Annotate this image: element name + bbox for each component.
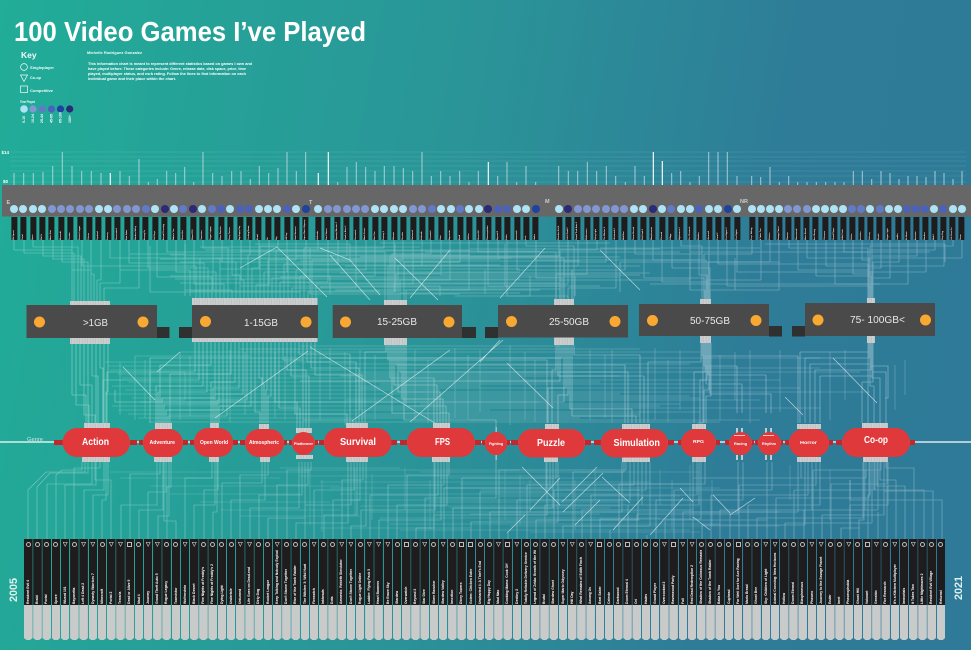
game price tags and time played dots: not rated: Mad 4	[933, 234, 935, 240]
timeline of 100 game cards, 2005 to 2021: Stardew	[395, 591, 399, 604]
timeline of 100 game cards, 2005 to 2021: Transistor	[174, 588, 178, 604]
game price tags and time played dots: ESRB E: Wii Sports	[13, 230, 15, 240]
timeline of 100 game cards, 2005 to 2021: Portal	[44, 594, 48, 604]
timeline of 100 game cards, 2005 to 2021: Red Dead Redemption 2	[690, 565, 694, 604]
genre: Puzzle	[518, 429, 585, 458]
panel: disk space 1-15GB	[179, 298, 318, 342]
timeline of 100 game cards, 2005 to 2021: Far Well Sort for Ace Racing	[736, 558, 740, 604]
genre: Adventure	[143, 429, 183, 457]
game price tags and time played dots: ESRB E: Slime Rancher	[220, 226, 222, 240]
genre: FPS	[407, 428, 475, 457]
panel: disk space 75-100GB	[792, 298, 935, 343]
timeline of 100 game cards, 2005 to 2021: Phasmophobia	[846, 580, 850, 604]
timeline of 100 game cards, 2005 to 2021: Minecraft	[100, 589, 104, 604]
timeline of 100 game cards, 2005 to 2021: Big Happy Day	[487, 580, 491, 604]
game price tags and time played dots: ESRB E: Overcooked	[116, 228, 118, 240]
game price tags and time played dots: ESRB T: Bayonetta	[449, 230, 451, 240]
timeline of 100 game cards, 2005 to 2021: Dead or Alive 5	[127, 580, 131, 604]
game price tags and time played dots: ESRB T: Genshin	[402, 232, 404, 240]
genre: Adventure: Adventure	[150, 440, 175, 446]
game price tags and time played dots: ESRB T: Dead or Alive 5	[345, 226, 347, 240]
game price tags and time played dots: ESRB T: Overwatch	[355, 230, 357, 240]
game price tags and time played dots: ESRB M: The Witcher 3	[604, 227, 606, 240]
brightest price bars	[110, 152, 662, 185]
timeline of 100 game cards, 2005 to 2021: Braid	[35, 595, 39, 604]
rating labels: E	[6, 200, 10, 206]
timeline of 100 game cards, 2005 to 2021: Little Nightmares 2	[920, 573, 924, 604]
genre: Racing: Racing	[734, 442, 748, 446]
key: player modes	[20, 50, 54, 93]
genre: Platformer: Platformer	[294, 442, 314, 446]
timeline of 100 game cards, 2005 to 2021: Be Brave Sky	[386, 582, 390, 604]
key: player modes: Competitive	[30, 88, 54, 93]
game price tags and time played dots: ESRB E: Super Mario Odyssey	[304, 220, 306, 240]
genre: Rhythm	[758, 432, 781, 455]
timeline of 100 game cards, 2005 to 2021: Wolfenstein	[183, 585, 187, 604]
timeline of 100 game cards, 2005 to 2021: Rogue Light Online	[358, 573, 362, 604]
game price tags and time played dots: not rated: Amnesia	[915, 232, 917, 240]
game price tags and time played dots: ESRB T: Hollow	[468, 233, 470, 240]
game price tags and time played dots: ESRB M: Unturned	[708, 231, 710, 240]
game price tags and time played dots: ESRB E: Ori	[267, 237, 269, 240]
title: 100 Video Games I’ve Played	[14, 16, 366, 47]
game price tags and time played dots: ESRB M	[555, 205, 741, 240]
panel: disk space 1-15GB: 1-15GB	[244, 318, 278, 329]
key: time played scale: 100+	[68, 115, 72, 123]
game price tags and time played dots: not rated: Inscrtion	[860, 232, 862, 240]
timeline of 100 game cards, 2005 to 2021: Totally Reliable Delivery Service	[524, 552, 528, 604]
game price tags and time played dots: not rated: Be Brave	[906, 231, 908, 240]
timeline of 100 game cards, 2005 to 2021: It Takes Two	[911, 584, 915, 604]
game price tags and time played dots: ESRB M: Resident Evil 4	[558, 226, 560, 240]
genre: RPG	[681, 429, 716, 457]
key: player modes: Co-op	[30, 75, 42, 80]
timeline of 100 game cards, 2005 to 2021: Bayonetta	[72, 588, 76, 604]
panel: disk space 50-75GB	[639, 299, 782, 343]
genre: Survival: Survival	[340, 437, 376, 448]
timeline of 100 game cards, 2005 to 2021: Dirty Dog	[256, 589, 260, 604]
game price tags and time played dots: ESRB M: Uncharted 4	[614, 228, 616, 240]
timeline of 100 game cards, 2005 to 2021	[24, 539, 945, 640]
timeline of 100 game cards, 2005 to 2021: Baba Is You	[717, 585, 721, 604]
timeline of 100 game cards, 2005 to 2021: Shadow of the Tomb Raider	[708, 559, 712, 604]
timeline of 100 game cards, 2005 to 2021: Doom Eternal 4	[625, 579, 629, 604]
timeline of 100 game cards, 2005 to 2021: Don't Starve Together	[349, 569, 353, 604]
panel: disk space 25-50GB: 25-50GB	[549, 317, 589, 328]
game price tags and time played dots: ESRB M: Five Nights 2	[726, 228, 728, 240]
game price tags and time played dots: ESRB T: Destiny 2	[383, 231, 385, 240]
game price tags and time played dots: not rated: Savage Planet	[778, 226, 780, 240]
game price tags and time played dots: not rated: Phasmo	[787, 232, 789, 240]
author name: Michelle Rodriguez Gonzalez	[87, 51, 142, 55]
genre: FPS: FPS	[435, 437, 450, 448]
game price tags and time played dots: not rated: Keep Talking	[751, 228, 753, 240]
game price tags and time played dots: ESRB M: Village	[670, 234, 672, 240]
game price tags and time played dots: ESRB E: Spore	[32, 234, 34, 240]
genre: Co-op	[842, 428, 910, 457]
timeline of 100 game cards, 2005 to 2021: Fire Research	[883, 582, 887, 604]
timeline of 100 game cards, 2005 to 2021: Among Us	[588, 587, 592, 604]
timeline of 100 game cards, 2005 to 2021: Genshin	[874, 590, 878, 604]
timeline of 100 game cards, 2005 to 2021: Ender	[828, 594, 832, 604]
game price tags and time played dots: ESRB M: Fire Research	[689, 227, 691, 240]
genre: Rhythm: Rhythm	[762, 442, 777, 446]
game price tags and time played dots: ESRB T: Inert	[525, 236, 527, 240]
timeline of 100 game cards, 2005 to 2021: Undertale	[229, 588, 233, 604]
game price tags and time played dots: not rated: Delivery	[869, 232, 871, 240]
game price tags and time played dots: ESRB M: Shadow	[698, 232, 700, 240]
genre: Atmospheric	[245, 429, 284, 457]
game price tags and time played dots: ESRB E: Beat Saber	[126, 230, 128, 240]
game price tags and time played dots: not rated: Rogue Light	[887, 228, 889, 240]
game price tags and time played dots: ESRB E: Big Happy Day	[239, 226, 241, 240]
timeline of 100 game cards, 2005 to 2021: Slime Rancher	[432, 580, 436, 604]
timeline of 100 game cards, 2005 to 2021: Amnesia: Rebirth Simulator	[339, 559, 343, 604]
game price tags and time played dots: ESRB M: Grand Theft Auto 5	[576, 222, 578, 240]
timeline of 100 game cards, 2005 to 2021: Inert	[837, 597, 841, 604]
timeline of 100 game cards, 2005 to 2021: Dying Light	[220, 585, 224, 604]
game price tags and time played dots: not rated: Colossus	[824, 231, 826, 240]
timeline of 100 game cards, 2005 to 2021: Star Dive	[422, 589, 426, 604]
genre: Open World	[194, 428, 233, 457]
genre: Action	[62, 428, 130, 457]
genre: Simulation	[601, 429, 668, 458]
game price tags and time played dots: ESRB M: Doom Eternal	[633, 227, 635, 240]
panel: disk space under 1GB: >1GB	[83, 318, 108, 329]
game price tags and time played dots: ESRB E	[10, 205, 310, 240]
timeline of 100 game cards, 2005 to 2021: Mad Max	[496, 590, 500, 604]
timeline of 100 game cards, 2005 to 2021: What Remains of Edith Finch	[579, 557, 583, 604]
rating labels: T	[309, 200, 313, 206]
game price tags and time played dots: ESRB E: Minecraft	[60, 231, 62, 240]
genre axis line: Genre	[27, 437, 43, 443]
genre: RPG: RPG	[693, 439, 705, 444]
timeline of 100 game cards, 2005 to 2021: Dota	[330, 596, 334, 604]
game price tags and time played dots: ESRB E: Sky	[276, 236, 278, 240]
timeline of 100 game cards, 2005 to 2021: Super Mario Odyssey	[561, 569, 565, 604]
timeline of 100 game cards, 2005 to 2021: Rise of the Tomb Raider	[293, 565, 297, 604]
game price tags and time played dots: not rated: Kitchen	[769, 233, 771, 240]
panel: disk space 25-50GB	[485, 299, 628, 345]
game price tags and time played dots: ESRB E: Terraria	[69, 233, 71, 240]
game price tags and time played dots: ESRB E: Stardew Valley	[135, 226, 137, 240]
game price tags and time played dots: ESRB T	[314, 205, 540, 240]
game price tags and time played dots: ESRB T: Phasmophobia	[487, 226, 489, 240]
game price tags and time played dots: ESRB E: Rocket League	[79, 226, 81, 240]
timeline of 100 game cards, 2005 to 2021: Dynasty Warriors 7	[91, 573, 95, 604]
timeline of 100 game cards, 2005 to 2021: Terraria	[118, 592, 122, 604]
timeline of 100 game cards, 2005 to 2021: Dicey Towers	[459, 582, 463, 604]
game price tags and time played dots: not rated: Mario Bread	[805, 228, 807, 240]
genre: Fighting: Fighting	[489, 442, 503, 446]
game price tags and time played dots: ESRB T: Star Dive	[374, 231, 376, 240]
timeline of 100 game cards, 2005 to 2021: Stardew Valley	[441, 580, 445, 604]
timeline of 100 game cards, 2005 to 2021: Celeste	[607, 592, 611, 604]
rating labels: M	[545, 199, 550, 205]
game price tags and time played dots: not rated: Grand Player	[833, 228, 835, 240]
game price tags and time played dots: ESRB T: Undertale	[317, 231, 319, 240]
game price tags and time played dots: ESRB T: Braid	[459, 235, 461, 240]
year label: 2005: 2005	[8, 578, 20, 602]
timeline of 100 game cards, 2005 to 2021: Resident Evil 4	[26, 580, 30, 604]
game price tags and time played dots: ESRB E: Dicey Towers	[229, 227, 231, 240]
timeline of 100 game cards, 2005 to 2021: Rogue Legacy	[164, 581, 168, 604]
game price tags and time played dots: ESRB T: Valorant	[393, 232, 395, 240]
price axis labels: $14	[2, 150, 10, 155]
game price tags and time played dots: not rated: It Takes Two	[760, 228, 762, 240]
timeline of 100 game cards, 2005 to 2021: Golem: Chicken Eater	[468, 569, 472, 604]
rating labels	[6, 199, 748, 206]
timeline of 100 game cards, 2005 to 2021: Life Goes on Dead-end	[247, 567, 251, 604]
price bars: ESRB T	[318, 152, 536, 185]
game price tags and time played dots: ESRB T: Dota	[440, 236, 442, 240]
price axis labels: $0	[3, 179, 9, 184]
timeline of 100 game cards, 2005 to 2021: Brutal	[542, 594, 546, 604]
game price tags and time played dots: not rated	[748, 205, 966, 240]
game price tags and time played dots: not rated: Golem	[851, 234, 853, 240]
panel: disk space under 1GB	[26, 301, 170, 344]
timeline of 100 game cards, 2005 to 2021: Stardew Ghost	[551, 580, 555, 604]
key: time played scale: Time Played	[20, 99, 35, 104]
timeline of 100 game cards, 2005 to 2021: Darkwood	[616, 588, 620, 604]
timeline of 100 game cards, 2005 to 2021: Firewatch	[312, 588, 316, 604]
genre: Simulation: Simulation	[614, 438, 660, 449]
timeline of 100 game cards, 2005 to 2021: Inscrtion	[450, 590, 454, 604]
key: time played scale: 10-24	[31, 114, 35, 123]
genre: Fighting	[485, 432, 507, 455]
game price tags and time played dots: not rated: Ladder	[897, 233, 899, 240]
key: time played scale: 0-10	[22, 116, 26, 123]
game price tags and time played dots: not rated: Stardew	[924, 232, 926, 240]
game price tags and time played dots: ESRB T: Firewatch	[430, 231, 432, 240]
game price tags and time played dots: ESRB T: Immortals	[516, 230, 518, 240]
game price tags and time played dots: ESRB M: Portal 2	[717, 233, 719, 240]
timeline of 100 game cards, 2005 to 2021: Grand Theft Auto 5	[155, 573, 159, 604]
genre: Puzzle: Puzzle	[537, 438, 565, 449]
genre: Open World: Open World	[200, 440, 228, 446]
timeline of 100 game cards, 2005 to 2021: It's a Kitchen Multiplayer	[893, 564, 897, 604]
game price tags and time played dots: ESRB T: Ghost Hill	[478, 231, 480, 240]
timeline of 100 game cards, 2005 to 2021: Destiny 2	[515, 589, 519, 604]
game price tags and time played dots: ESRB E: Hill Day	[286, 233, 288, 240]
timeline of 100 game cards, 2005 to 2021: The Witcher 3: Wild Hunt	[303, 564, 307, 604]
timeline of 100 game cards, 2005 to 2021: Phasmo	[810, 591, 814, 604]
rating labels: NR	[740, 199, 748, 205]
genre: Horror: Horror	[800, 440, 817, 445]
panel: disk space 15-25GB	[333, 300, 476, 345]
timeline of 100 game cards, 2005 to 2021: Ori	[634, 599, 638, 604]
game price tags and time played dots: ESRB E: Brutal	[257, 234, 259, 240]
timeline of 100 game cards, 2005 to 2021: Immortals	[902, 588, 906, 604]
game price tags and time played dots: ESRB E: Portal	[22, 234, 24, 240]
game price tags and time played dots: ESRB E: Journey	[107, 232, 109, 240]
intro text block: This information chart is meant to represent different statistics based on games I own and	[88, 62, 253, 66]
timeline of 100 game cards, 2005 to 2021: Uncharted 4: A Thief's End	[478, 561, 482, 604]
price axis labels	[2, 150, 10, 184]
timeline of 100 game cards, 2005 to 2021: Animal Crossing: New Horizons	[773, 553, 777, 604]
timeline of 100 game cards, 2005 to 2021: Ladder: Flying Pack 3	[367, 569, 371, 604]
game price tags and time played dots: ESRB M: Nightmares 2	[679, 227, 681, 240]
timeline of 100 game cards, 2005 to 2021: Don't Starve Together	[284, 569, 288, 604]
timeline of 100 game cards, 2005 to 2021: Portal 2	[109, 592, 113, 604]
game price tags and time played dots: ESRB E: Heart Banners	[295, 226, 297, 240]
panel: disk space 50-75GB: 50-75GB	[690, 316, 730, 327]
game price tags and time played dots: not rated: Doom	[960, 234, 962, 240]
game price tags and time played dots: ESRB E: Baba Is You	[173, 229, 175, 240]
panel: ESRB rating strip	[2, 185, 971, 216]
game price tags and time played dots: ESRB M: Five Nights	[736, 229, 738, 240]
timeline of 100 game cards, 2005 to 2021: Cooking Mama: Cook Off	[505, 564, 509, 604]
timeline of 100 game cards, 2005 to 2021: Left 4 Dead 2	[81, 583, 85, 604]
timeline of 100 game cards, 2005 to 2021: Five Nights at Freddy's 2	[210, 564, 214, 604]
timeline of 100 game cards, 2005 to 2021: Doom Eternal	[791, 582, 795, 604]
timeline of 100 game cards, 2005 to 2021: Spore	[54, 594, 58, 604]
intro text block	[88, 62, 253, 81]
game price tags and time played dots: ESRB M: Blasphemous	[651, 227, 653, 240]
game price tags and time played dots: ESRB M: Wolfenstein	[586, 229, 588, 240]
timeline of 100 game cards, 2005 to 2021: Unturned	[238, 589, 242, 604]
timeline of 100 game cards, 2005 to 2021: Hill Day	[570, 592, 574, 604]
timeline of 100 game cards, 2005 to 2021: Journey to the Savage Planet	[819, 557, 823, 604]
game price tags and time played dots: not rated: Breath	[878, 234, 880, 240]
genre: Atmospheric: Atmospheric	[249, 440, 279, 446]
genre: Survival	[324, 428, 392, 457]
genre: Co-op: Co-op	[864, 435, 888, 446]
key: time played scale: 25-44	[40, 114, 44, 123]
game price tags and time played dots: ESRB E: Ghost Bee	[182, 230, 184, 240]
game price tags and time played dots: ESRB M: Dying Light	[595, 229, 597, 240]
timeline of 100 game cards, 2005 to 2021: Overwatch	[404, 587, 408, 604]
price bars: not rated	[752, 167, 962, 185]
game price tags and time played dots: ESRB E: Mario Kart	[50, 230, 52, 240]
game price tags and time played dots: ESRB T: Dynasty Warriors 7	[336, 222, 338, 240]
game price tags and time played dots: ESRB M: Mad Max	[623, 232, 625, 240]
timeline of 100 game cards, 2005 to 2021: Five Nights at Freddy's	[201, 567, 205, 604]
timeline of 100 game cards, 2005 to 2021: Hollow	[782, 593, 786, 604]
timeline of 100 game cards, 2005 to 2021: Resident Evil Village	[929, 571, 933, 604]
timeline of 100 game cards, 2005 to 2021: Ghost Hill	[856, 588, 860, 604]
panel: disk space 15-25GB: 15-25GB	[377, 317, 417, 328]
game price tags and time played dots: ESRB E: Animal Crossing	[163, 224, 165, 240]
timeline of 100 game cards, 2005 to 2021: Blasphemous	[800, 582, 804, 604]
timeline of 100 game cards, 2005 to 2021: Rocket League	[266, 580, 270, 604]
genre connector stubs	[82, 423, 888, 462]
key: time played scale: 45-65	[50, 114, 54, 123]
game price tags and time played dots: ESRB T: Don't Starve	[326, 228, 328, 240]
genre axis line	[0, 437, 971, 445]
genre: Racing	[729, 432, 752, 455]
game price tags and time played dots: ESRB T: Beyond 2	[497, 231, 499, 240]
game price tags and time played dots: ESRB M: Red Dead 2	[642, 229, 644, 240]
game price tags and time played dots: ESRB T: Darkwood	[412, 230, 414, 240]
game price tags and time played dots: ESRB E: Fall Guys	[154, 231, 156, 240]
timeline of 100 game cards, 2005 to 2021: Journey	[146, 591, 150, 604]
timeline of 100 game cards, 2005 to 2021: Returnal	[939, 590, 943, 604]
timeline of 100 game cards, 2005 to 2021: Cuphead	[727, 589, 731, 604]
game price tags and time played dots: not rated: Life Goes On	[951, 228, 953, 240]
game price tags and time played dots: not rated: Edith Finch	[842, 229, 844, 240]
timeline of 100 game cards, 2005 to 2021: Mad 4	[137, 594, 141, 604]
game price tags and time played dots: ESRB T: Black Desert	[364, 228, 366, 240]
timeline of 100 game cards, 2005 to 2021: Inkheads	[321, 589, 325, 604]
game price tags and time played dots: ESRB T: Hades	[534, 234, 536, 240]
key: time played scale: 65-100	[58, 112, 62, 123]
timeline of 100 game cards, 2005 to 2021: Fall	[681, 598, 685, 604]
game price tags and time played dots: ESRB E: Cuphead	[97, 231, 99, 240]
price grid lines	[10, 152, 966, 182]
genre: Action: Action	[82, 437, 109, 448]
game price tags and time played dots: ESRB E: Wizard 101	[192, 230, 194, 240]
timeline of 100 game cards, 2005 to 2021: Overcooked 2	[662, 582, 666, 604]
timeline of 100 game cards, 2005 to 2021: Grand Player	[653, 583, 657, 604]
game price tags and time played dots: ESRB E: Wii Fit	[41, 234, 43, 240]
price bars: ESRB E	[14, 152, 306, 185]
game price tags and time played dots: ESRB E: Among Us	[144, 230, 146, 240]
price bars: ESRB M	[559, 152, 737, 185]
game price tags and time played dots: ESRB E: Rogue Legacy	[210, 226, 212, 240]
genre: Platformer	[292, 432, 315, 455]
game price tags and time played dots: not rated: Ravenwood	[796, 229, 798, 240]
timeline of 100 game cards, 2005 to 2021: Beyond 2	[413, 589, 417, 604]
intro text block: have played before. These categories include: Genre, release date, disk space, price, time	[88, 67, 246, 71]
game price tags and time played dots: not rated: Dirty Dog	[942, 231, 944, 240]
timeline of 100 game cards, 2005 to 2021: Sky: Children of Light	[764, 569, 768, 604]
timeline of 100 game cards, 2005 to 2021: Heart Banners	[376, 581, 380, 604]
year label: 2021: 2021	[953, 576, 965, 600]
game price tags and time played dots: ESRB T: Ender	[506, 234, 508, 240]
game price tags and time played dots: not rated: Ace Racing	[814, 229, 816, 240]
game price tags and time played dots: ESRB T: Inkheads	[421, 231, 423, 240]
intro text block: played, multiplayer status, and esrb rating. Follow the lines to find information on each	[88, 72, 247, 76]
timeline of 100 game cards, 2005 to 2021: Hades	[644, 594, 648, 604]
game price tags and time played dots: ESRB M: Left 4 Dead 2	[567, 228, 569, 240]
key: time played scale	[20, 99, 73, 123]
genre: Horror	[789, 429, 829, 457]
game price tags and time played dots: ESRB E: Celeste	[88, 233, 90, 240]
timeline of 100 game cards, 2005 to 2021: Ghost Bee	[754, 587, 758, 604]
intro text block: individual game and their place within the chart.	[88, 77, 176, 81]
timeline of 100 game cards, 2005 to 2021: Wizard 101	[63, 586, 67, 604]
game price tags and time played dots: ESRB M: Returnal	[661, 232, 663, 240]
key: player modes: Key	[21, 50, 37, 60]
panel: disk space 75-100GB: 75- 100GB<	[850, 315, 905, 326]
key: player modes: Singleplayer	[30, 65, 54, 70]
timeline of 100 game cards, 2005 to 2021: Ravenwood Party	[671, 576, 675, 604]
timeline of 100 game cards, 2005 to 2021: Valorant	[865, 591, 869, 604]
game price tags and time played dots: ESRB E: Transistor	[201, 230, 203, 240]
timeline of 100 game cards, 2005 to 2021: Beat Saber	[598, 586, 602, 604]
game price tags and time played dots: ESRB E: Cooking Mama	[248, 226, 250, 240]
timeline of 100 game cards, 2005 to 2021: Black Desert	[192, 583, 196, 604]
timeline of 100 game cards, 2005 to 2021: Mario Bread	[745, 584, 749, 604]
